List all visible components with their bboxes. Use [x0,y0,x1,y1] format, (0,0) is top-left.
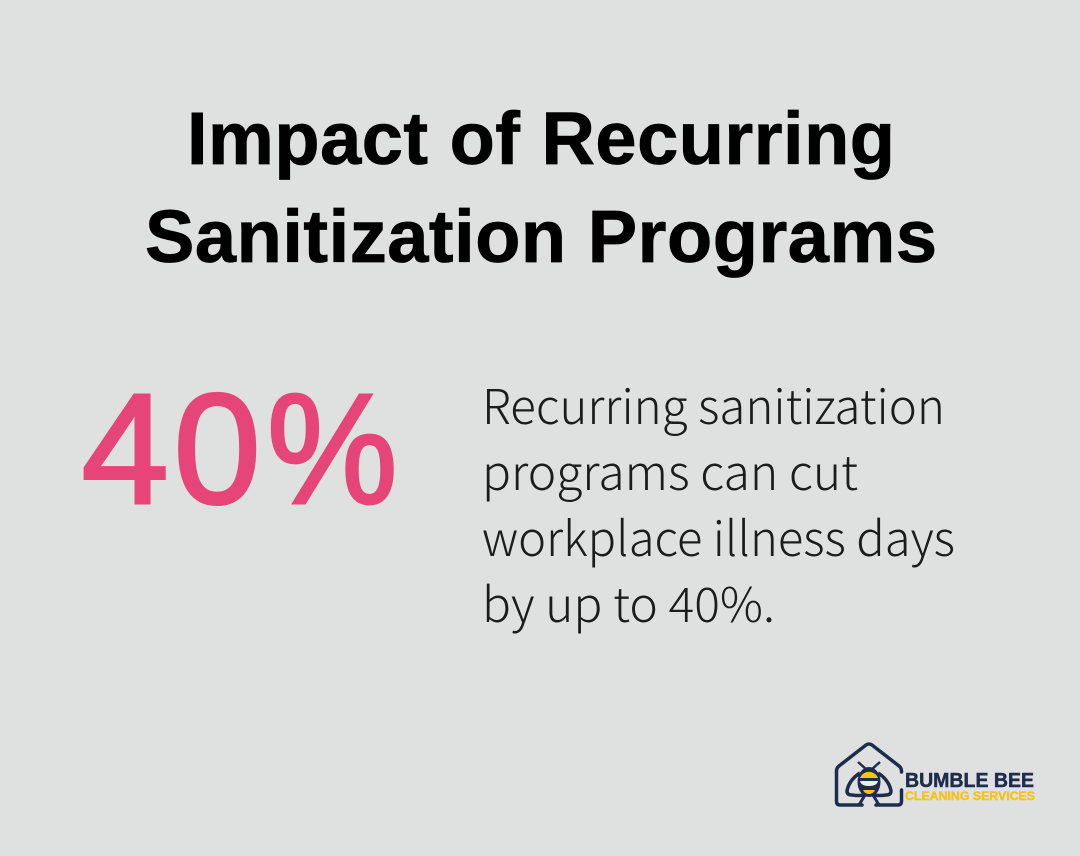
description text: Recurring sanitization [482,368,945,438]
title: Impact of Recurring [187,97,895,180]
big statistic: 40%: 40 [82,362,261,537]
logo wordmark: BUMBLE BEE [905,770,1034,792]
description text [482,368,955,636]
description text: programs can cut [482,434,858,504]
big statistic: 40% [82,361,398,537]
big statistic: 40%: % [267,361,398,537]
icon: bee [847,762,891,805]
description text: by up to 40%. [482,566,775,636]
title: Sanitization Programs [145,195,937,278]
description text: workplace illness days [482,500,955,570]
logo: Bumble Bee Cleaning Services [836,744,1035,805]
title [145,97,937,278]
logo tagline: CLEANING SERVICES [905,791,1035,803]
icon: house outline [836,744,902,805]
